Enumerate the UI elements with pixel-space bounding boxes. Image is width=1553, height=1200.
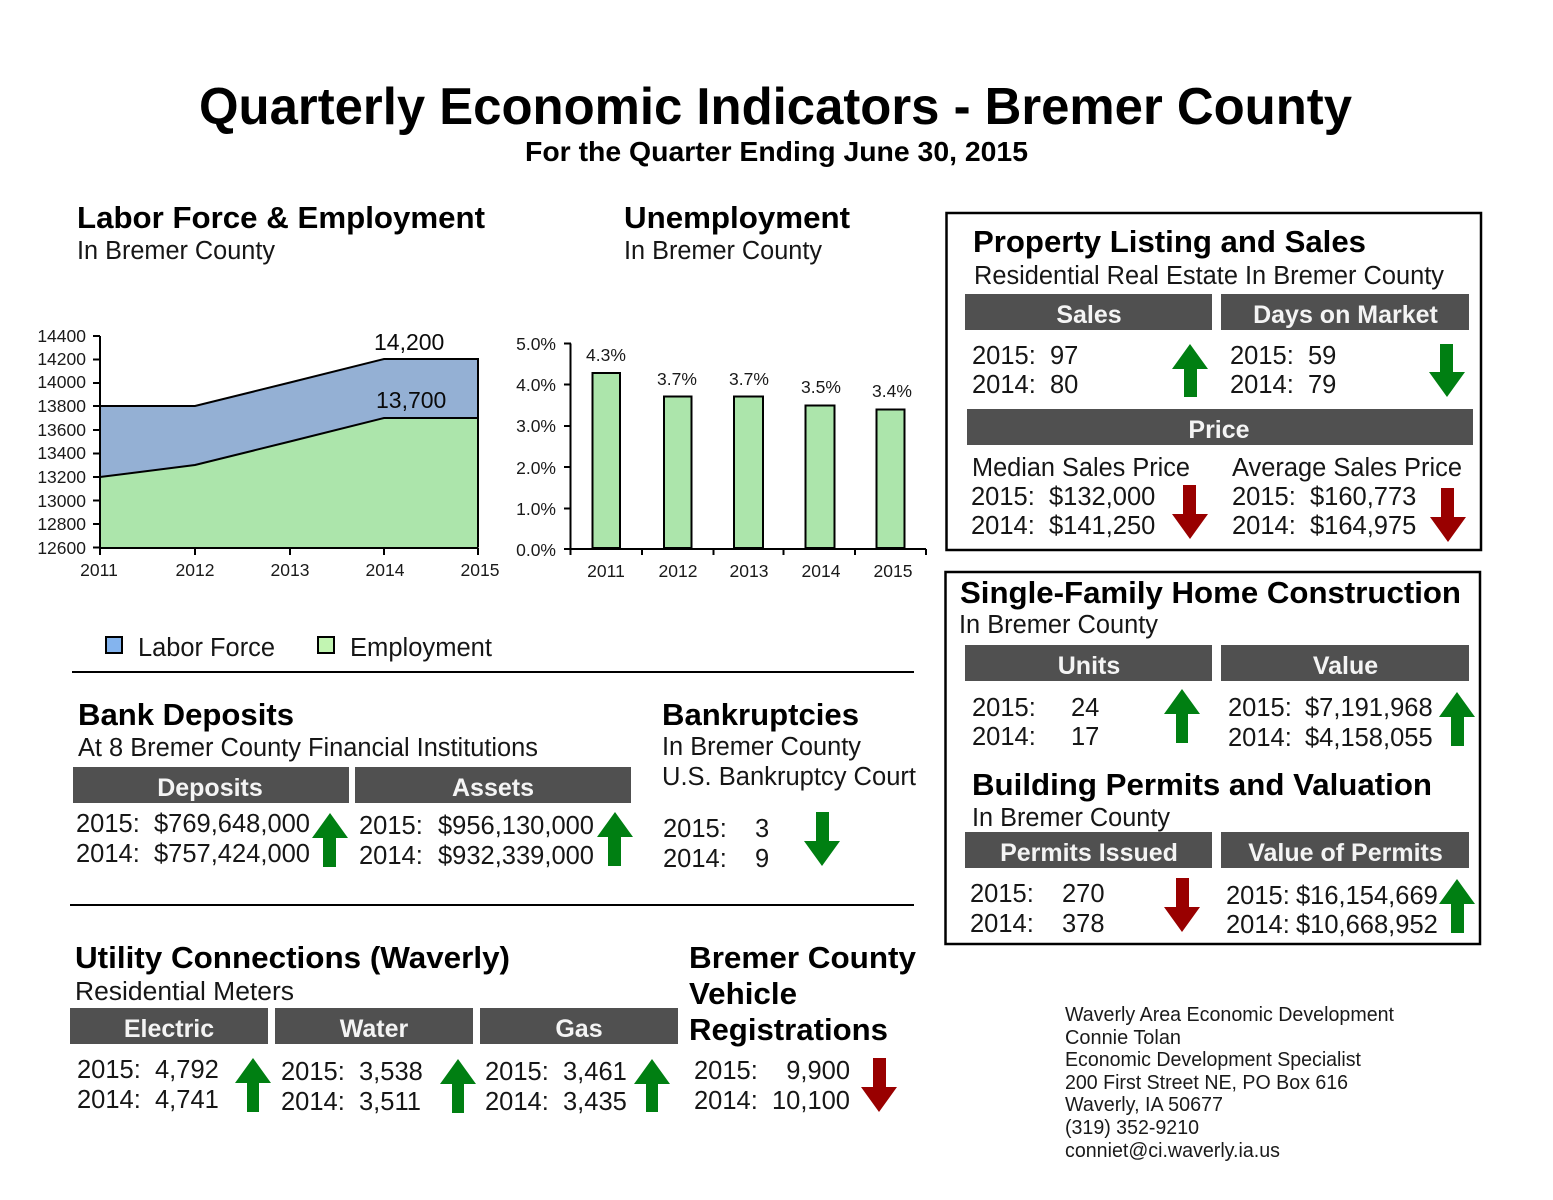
units figures: 2014: [972,723,1036,751]
heading: building permits and valuation [972,767,1432,832]
value of permits figures [1226,882,1438,939]
bar chart: unemployment: 3.7% [729,369,769,389]
electric figures: 4,792 [155,1056,219,1084]
icon: green up arrow [440,1059,476,1113]
bar chart: unemployment: 2015 [874,561,912,581]
bankruptcy figures: 9 [755,845,769,873]
contact block: (319) 352-9210 [1065,1117,1199,1139]
days on market figures: 2015: [1230,342,1294,370]
average sales price: $164,975 [1310,512,1416,540]
area chart: labor force and employment: 2011 [80,560,118,580]
bar chart: unemployment: 2.0% [516,458,556,478]
area chart: labor force and employment: 13000 [37,491,86,511]
icon: red down arrow [1164,878,1200,932]
heading: bank deposits: At 8 Bremer County Financial Institutions [78,734,538,762]
heading: single-family home construction: In Bremer County [959,611,1158,639]
header: days on market: Days on Market [1253,301,1439,329]
electric figures: 2015: [77,1056,141,1084]
water figures: 3,511 [359,1088,421,1116]
bankruptcy figures: 3 [755,815,769,843]
icon: green up arrow [1439,692,1475,746]
value figures: $4,158,055 [1305,724,1433,752]
heading: bank deposits: Bank Deposits [78,697,294,732]
heading: bankruptcies: In Bremer County [662,733,861,761]
deposits figures: 2015: [76,810,140,838]
icon: green down arrow [804,812,840,866]
area chart: labor force and employment: 13400 [37,443,86,463]
icon: green up arrow [597,812,633,866]
heading: unemployment: Unemployment [624,200,850,235]
area chart: labor force and employment: 12800 [37,514,86,534]
heading: bankruptcies: Bankruptcies [662,697,859,732]
header: value [1221,645,1469,681]
vehicle figures: 2015: [694,1057,758,1085]
panel: bank deposits [73,697,633,870]
sales figures: 2015: [972,342,1036,370]
bar chart: unemployment: 5.0% [516,334,556,354]
days on market figures: 79 [1308,371,1336,399]
heading: property listing and sales: Property Listing and Sales [973,224,1366,259]
median sales price: 2014: [971,512,1035,540]
heading: labor force and employment: Labor Force & Employment [77,200,485,235]
area chart: labor force and employment: 14200 [37,349,86,369]
bar chart: unemployment: 4.0% [516,375,556,395]
value of permits figures: 2014: [1226,911,1290,939]
bar chart: unemployment: 4.3% [586,345,626,365]
area chart: labor force and employment: 2014 [366,560,405,580]
value figures [1228,694,1433,752]
header: deposits: Deposits [157,774,263,802]
area chart: labor force and employment: 13,700 [376,387,446,413]
units figures: 24 [1071,694,1099,722]
area chart: labor force and employment: 2015 [461,560,499,580]
electric figures: 2014: [77,1086,141,1114]
bar chart: unemployment: 3.5% [801,377,841,397]
contact block: Economic Development Specialist [1065,1049,1361,1071]
icon: red down arrow [1430,488,1466,542]
permits issued figures: 2014: [970,910,1034,938]
area chart: labor force and employment: 2013 [271,560,309,580]
median sales price: Median Sales Price [972,454,1190,482]
bar chart: unemployment: 3.4% [872,381,912,401]
vehicle figures: 2014: [694,1087,758,1115]
header: water: Water [340,1015,409,1043]
bar chart: unemployment: 3.0% [516,416,556,436]
contact block: 200 First Street NE, PO Box 616 [1065,1072,1348,1094]
heading: vehicle registrations: Registrations [689,1012,888,1047]
header: value of permits [1221,832,1469,868]
header: deposits [73,767,349,803]
area chart: labor force and employment: 13200 [37,467,86,487]
subtitle: For the Quarter Ending June 30, 2015 [525,136,1028,167]
icon: green up arrow [1172,344,1208,397]
deposits figures [76,810,310,868]
heading: utility connections [75,940,510,1006]
days on market figures: 2014: [1230,371,1294,399]
vehicle figures: 9,900 [786,1057,850,1085]
area chart: labor force and employment [37,326,499,580]
average sales price: Average Sales Price [1232,454,1462,482]
header: price [967,409,1473,445]
water figures [281,1058,423,1116]
value figures: $7,191,968 [1305,694,1433,722]
icon: green up arrow [1164,689,1200,743]
header: permits issued [965,832,1212,868]
heading: vehicle registrations [689,940,917,1047]
bankruptcy figures: 2014: [663,845,727,873]
water figures: 2014: [281,1088,345,1116]
bar chart: unemployment: 1.0% [516,499,556,519]
icon: green up arrow [634,1059,670,1112]
bar chart: unemployment: 2012 [659,561,697,581]
header: value: Value [1313,652,1378,680]
heading: unemployment [624,200,850,265]
value figures: 2015: [1228,694,1292,722]
icon: red down arrow [1172,485,1208,539]
header: water [275,1008,473,1044]
assets figures: 2014: [359,842,423,870]
heading: property listing and sales: Residential Real Estate In Bremer County [974,262,1444,290]
header: days on market [1221,294,1469,330]
contact block: conniet@ci.waverly.ia.us [1065,1140,1280,1162]
heading: vehicle registrations: Bremer County [689,940,917,975]
area chart: labor force and employment: 12600 [37,538,86,558]
heading: labor force and employment [77,200,485,265]
panel: utility connections [70,940,678,1116]
value of permits figures: 2015: [1226,882,1290,910]
deposits figures: $757,424,000 [154,840,310,868]
vehicle figures [694,1057,850,1115]
legend: Employment [350,634,492,662]
contact block: Waverly, IA 50677 [1065,1094,1223,1116]
sales figures: 97 [1050,342,1078,370]
area chart: labor force and employment: 14,200 [374,329,444,355]
heading: building permits and valuation: In Bremer County [972,804,1170,832]
heading: utility connections: Residential Meters [75,978,294,1006]
assets figures [359,812,594,870]
average sales price [1232,454,1462,540]
heading: bankruptcies: U.S. Bankruptcy Court [662,763,916,791]
deposits figures: 2014: [76,840,140,868]
area chart: labor force and employment: 13800 [37,396,86,416]
days on market figures [1230,342,1336,399]
gas figures: 3,435 [563,1088,627,1116]
bar chart: unemployment: 2013 [730,561,768,581]
heading: utility connections: Utility Connections (Waverly) [75,940,510,975]
panel: bankruptcies [662,697,916,873]
sales figures: 2014: [972,371,1036,399]
area chart: labor force and employment: 14400 [37,326,86,346]
header: units: Units [1058,652,1120,680]
icon: red down arrow [861,1058,897,1112]
electric figures: 4,741 [155,1086,219,1114]
area chart: labor force and employment: 14000 [37,372,86,392]
gas figures [485,1058,627,1116]
days on market figures: 59 [1308,342,1336,370]
heading: building permits and valuation: Building Permits and Valuation [972,767,1432,802]
water figures: 3,538 [359,1058,423,1086]
average sales price: $160,773 [1310,483,1416,511]
heading: property listing and sales [973,224,1444,290]
bankruptcy figures: 2015: [663,815,727,843]
header: assets [355,767,631,803]
icon: green down arrow [1429,344,1465,397]
header: assets: Assets [452,774,534,802]
contact block: Connie Tolan [1065,1027,1181,1049]
header: value of permits: Value of Permits [1248,839,1443,867]
icon: green up arrow [312,813,348,867]
assets figures: 2015: [359,812,423,840]
median sales price: 2015: [971,483,1035,511]
area chart: labor force and employment: 2012 [176,560,214,580]
heading: vehicle registrations: Vehicle [689,976,797,1011]
icon: green up arrow [1439,879,1475,933]
header: gas [480,1008,678,1044]
header: units [965,645,1212,681]
heading: single-family home construction [959,575,1461,639]
bar chart: unemployment: 3.7% [657,369,697,389]
header: electric [70,1008,268,1044]
permits issued figures: 270 [1062,880,1105,908]
permits issued figures [970,880,1105,938]
heading: unemployment: In Bremer County [624,237,822,265]
bar chart: unemployment: 0.0% [516,540,556,560]
heading: single-family home construction: Single-Family Home Construction [960,575,1461,610]
vehicle figures: 10,100 [772,1087,850,1115]
median sales price: $141,250 [1049,512,1155,540]
header: sales [965,294,1212,330]
deposits figures: $769,648,000 [154,810,310,838]
units figures: 2015: [972,694,1036,722]
panel: single-family home construction and building permits [946,572,1480,944]
value of permits figures: $16,154,669 [1296,882,1438,910]
bar chart: unemployment [516,334,926,581]
contact block [1065,1004,1394,1162]
header: permits issued: Permits Issued [1000,839,1178,867]
header: electric: Electric [124,1015,214,1043]
contact block: Waverly Area Economic Development [1065,1004,1394,1026]
median sales price: $132,000 [1049,483,1155,511]
panel: property listing and sales [946,213,1481,550]
header: sales: Sales [1056,301,1122,329]
average sales price: 2014: [1232,512,1296,540]
bar chart: unemployment: 2011 [587,561,625,581]
icon: green up arrow [235,1058,271,1112]
sales figures: 80 [1050,371,1078,399]
heading: labor force and employment: In Bremer County [77,237,275,265]
gas figures: 2015: [485,1058,549,1086]
assets figures: $932,339,000 [438,842,594,870]
legend: Labor Force [138,634,275,662]
heading: bankruptcies [662,697,916,791]
electric figures [77,1056,219,1114]
assets figures: $956,130,000 [438,812,594,840]
bankruptcy figures [663,815,769,873]
bar chart: unemployment: 2014 [802,561,841,581]
water figures: 2015: [281,1058,345,1086]
median sales price [971,454,1190,540]
permits issued figures: 378 [1062,910,1105,938]
gas figures: 3,461 [563,1058,627,1086]
area chart: labor force and employment: 13600 [37,420,86,440]
units figures: 17 [1071,723,1099,751]
header: price: Price [1188,416,1250,444]
panel: vehicle registrations [689,940,917,1115]
value figures: 2014: [1228,724,1292,752]
gas figures: 2014: [485,1088,549,1116]
sales figures [972,342,1078,399]
permits issued figures: 2015: [970,880,1034,908]
units figures [972,694,1099,751]
value of permits figures: $10,668,952 [1296,911,1438,939]
header: gas: Gas [555,1015,603,1043]
average sales price: 2015: [1232,483,1296,511]
title: Quarterly Economic Indicators - Bremer County [199,78,1352,136]
legend [106,634,492,662]
heading: bank deposits [78,697,538,762]
